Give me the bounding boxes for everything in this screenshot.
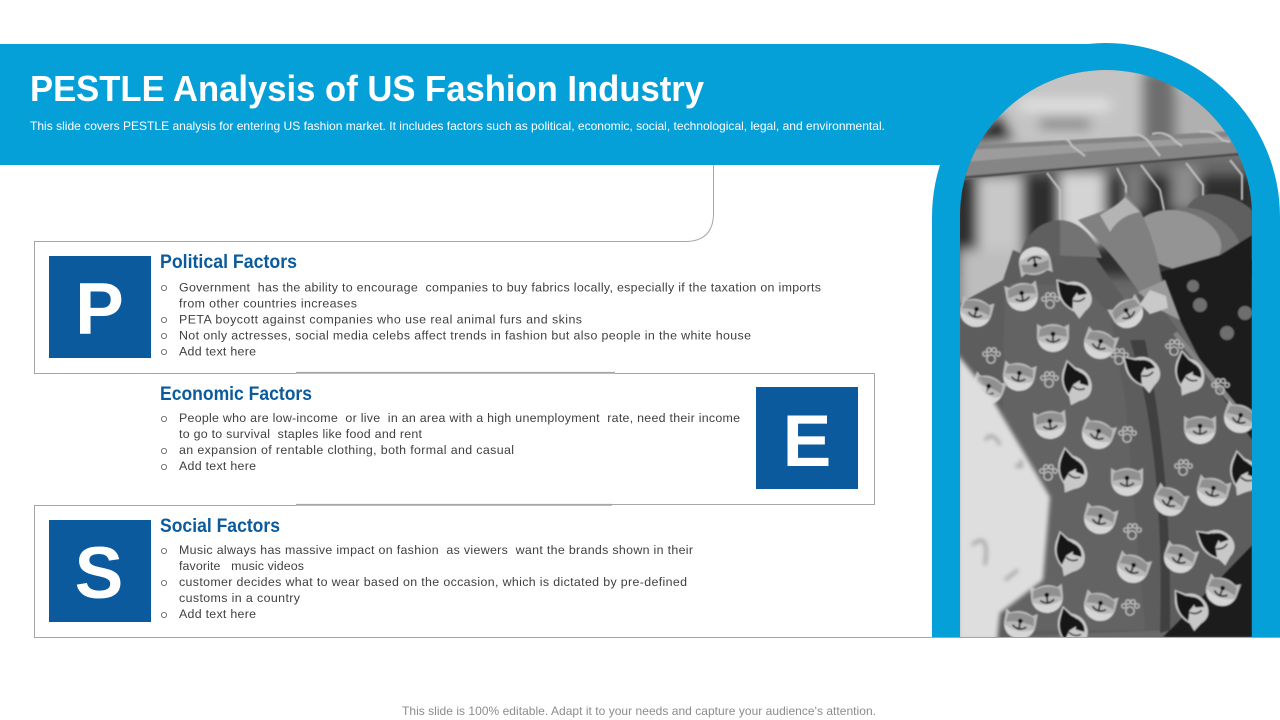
text block: economic bullets: to go to survival staples like food and rent — [179, 427, 423, 441]
text block: economic bullets — [161, 411, 740, 473]
text block: economic bullets: an expansion of rentable clothing, both formal and casual — [179, 443, 514, 457]
blue arch frame — [932, 43, 1280, 637]
icon: letter S: S — [75, 533, 123, 614]
subtitle: This slide covers PESTLE analysis for entering US fashion market. It includes factors such as political, economic, social, technological, legal, and environmental. — [30, 119, 885, 133]
photo: clothes on a rack — [960, 70, 1252, 637]
text block: political bullets: Government has the ability to encourage companies to buy fabrics locally, especially if the taxation on imports — [179, 280, 821, 294]
header band — [0, 44, 1106, 165]
text block: political bullets — [161, 280, 821, 358]
icon: letter P — [49, 256, 151, 358]
text block: political bullets: PETA boycott against companies who use real animal furs and skins — [179, 312, 582, 326]
heading: political factors: Political Factors — [160, 251, 297, 273]
text block: social bullets: Music always has massive impact on fashion as viewers want the brands shown in their — [179, 543, 693, 557]
text block: political bullets: from other countries increases — [179, 296, 357, 310]
text block: social bullets: favorite music videos — [179, 559, 304, 573]
text block: political bullets: Add text here — [179, 344, 256, 358]
panel: political factors — [49, 251, 821, 358]
text block: economic bullets: People who are low-income or live in an area with a high unemployment rate, need their income — [179, 411, 740, 425]
panel outlines — [34, 165, 1280, 638]
footer note: This slide is 100% editable. Adapt it to your needs and capture your audience's attention. — [402, 704, 876, 718]
icon: letter P: P — [75, 269, 124, 350]
panel: economic factors — [160, 383, 858, 489]
icon: letter E — [756, 387, 858, 489]
panel: social factors — [49, 515, 693, 622]
text block: economic bullets: Add text here — [179, 459, 256, 473]
heading: social factors: Social Factors — [160, 515, 280, 537]
text block: political bullets: Not only actresses, social media celebs affect trends in fashion but also people in the white house — [179, 328, 751, 342]
icon: letter E: E — [783, 401, 831, 482]
icon: letter S — [49, 520, 151, 622]
text block: social bullets: customs in a country — [179, 591, 301, 605]
text block: social bullets: Add text here — [179, 607, 256, 621]
text block: social bullets: customer decides what to wear based on the occasion, which is dictated by pre-defined — [179, 575, 687, 589]
title: PESTLE Analysis of US Fashion Industry — [30, 68, 704, 109]
heading: economic factors: Economic Factors — [160, 383, 312, 405]
text block: social bullets — [161, 543, 693, 621]
